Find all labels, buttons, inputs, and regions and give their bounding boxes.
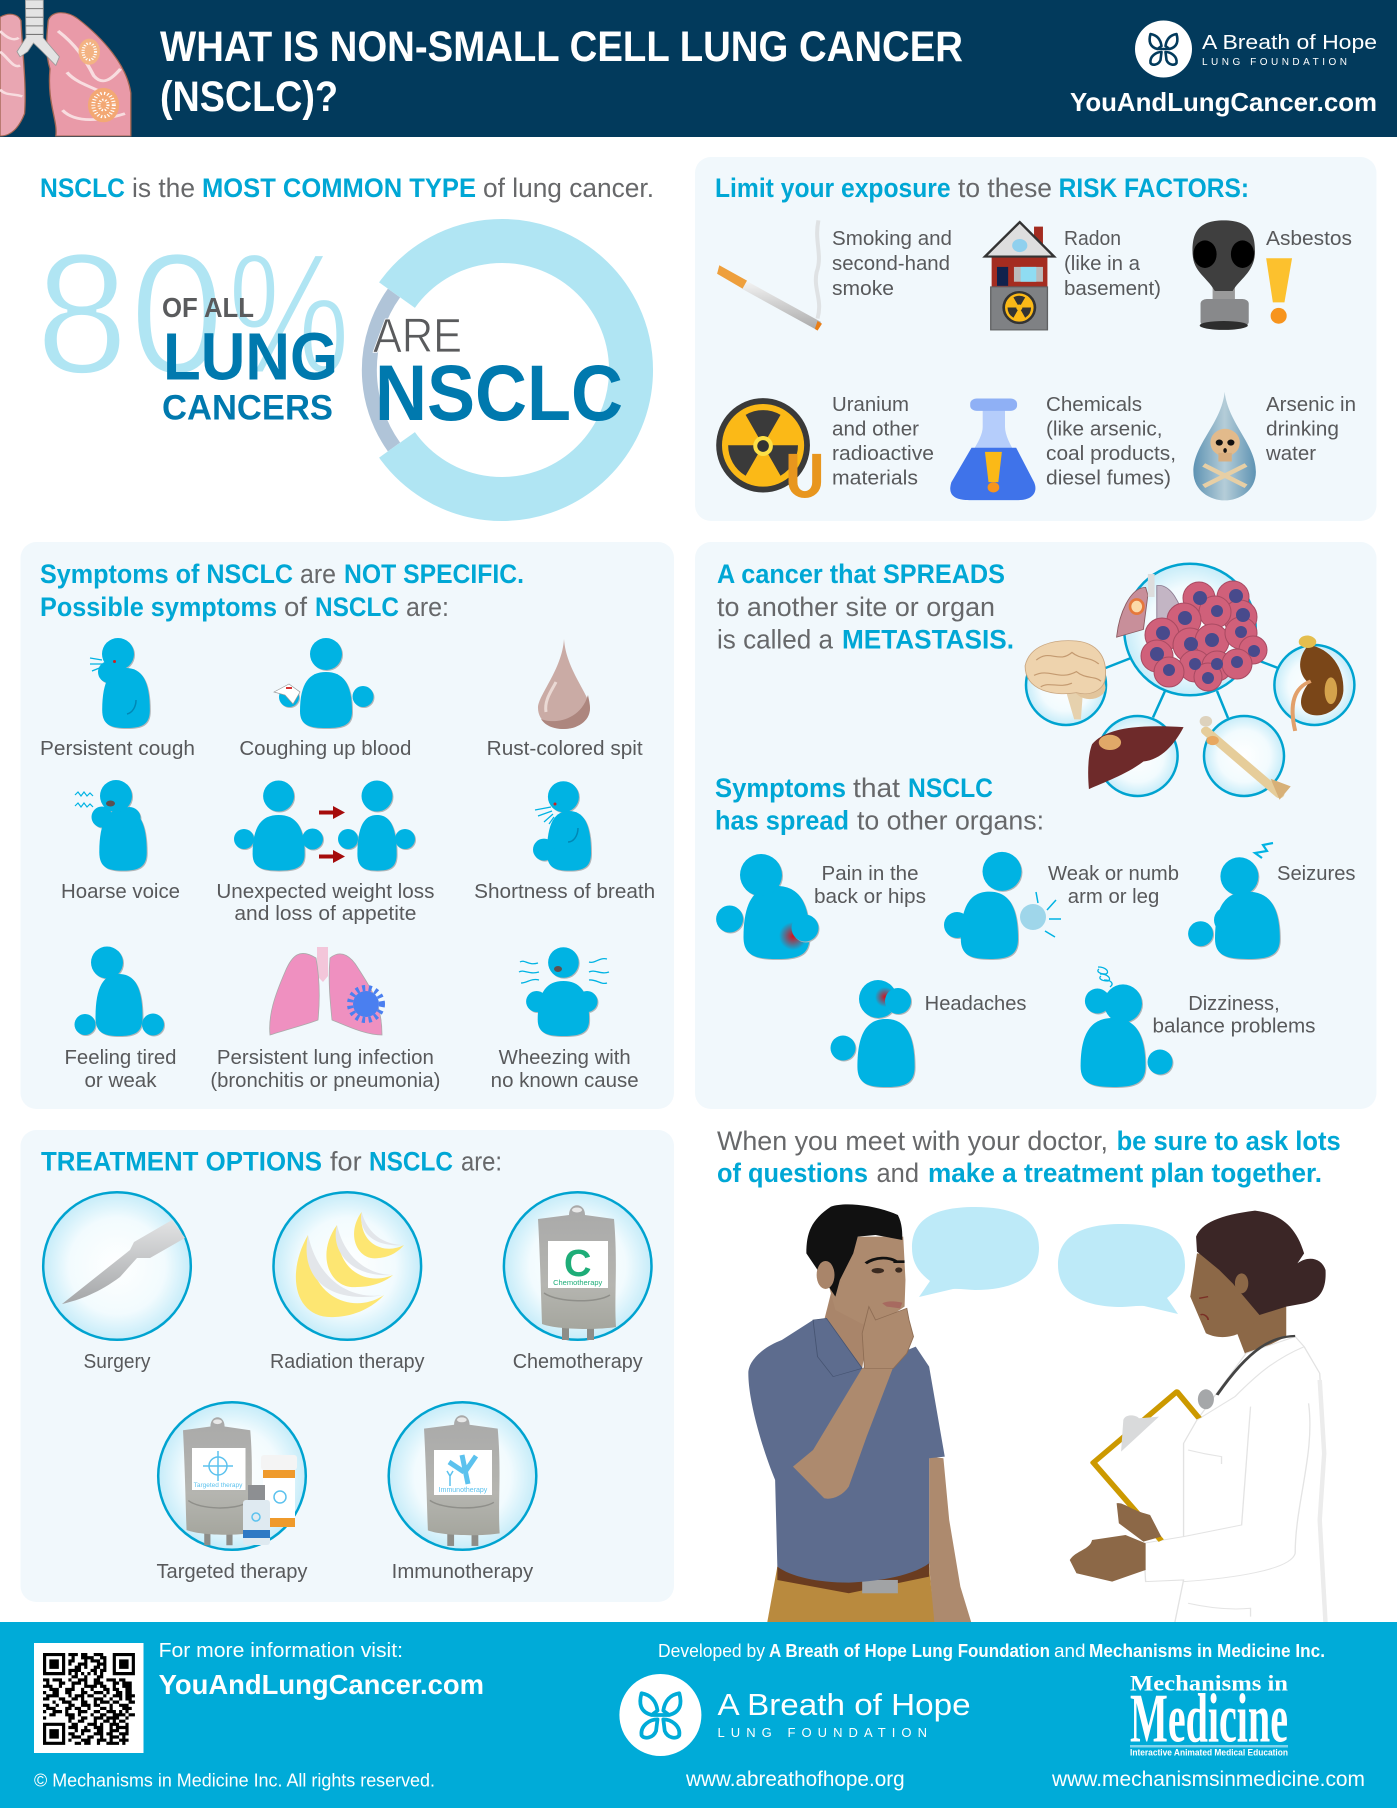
label: weight loss (216, 881, 434, 925)
text: developed by: Developed by (658, 1641, 765, 1661)
heading: most common type: NSCLC (40, 173, 125, 203)
heading: risk factors: to these (958, 173, 1052, 203)
text: more information (159, 1640, 484, 1700)
illustration: doctor speech bubble (1058, 1224, 1185, 1314)
label: persistent cough: Persistent cough (40, 738, 195, 760)
panel: risk factors (695, 157, 1376, 521)
logo: Mechanisms in Medicine: Mechanisms in (1130, 1671, 1288, 1696)
logo: A Breath of Hope: LUNG FOUNDATION (1202, 57, 1347, 68)
text: more information: YouAndLungCancer.com (159, 1669, 484, 1700)
icon: wheezing (519, 947, 609, 1036)
illustration: kidney (1293, 635, 1343, 731)
text: mechanisms website: www.mechanismsinmedicine.com (1051, 1768, 1365, 1791)
big number 80%: 8 (36, 218, 128, 410)
icon: chemotherapy bag: C (564, 1243, 591, 1285)
label: smoking (832, 228, 952, 300)
icon: targeted therapy: Targeted therapy (194, 1482, 243, 1489)
label: uranium: Uranium (832, 394, 909, 416)
label: lung infection: Persistent lung infection (217, 1047, 434, 1069)
heading: treatment options: for (330, 1147, 362, 1177)
text: are NSCLC: ARE (373, 310, 462, 363)
label: lung infection: (bronchitis or pneumonia) (210, 1070, 440, 1092)
label: dizziness: Dizziness, (1188, 993, 1280, 1015)
text: foundation website: www.abreathofhope.org (685, 1768, 905, 1791)
heading: symptoms: Symptoms of NSCLC (40, 559, 293, 589)
section: talk with doctor (717, 1126, 1341, 1623)
label: immunotherapy: Immunotherapy (392, 1561, 533, 1583)
label: targeted therapy: Targeted therapy (156, 1561, 308, 1583)
icon: shortness of breath (533, 781, 591, 871)
logo: A Breath of Hope: A Breath of Hope (1202, 32, 1377, 54)
label: chemicals: (like arsenic, (1046, 419, 1162, 441)
label: weight loss: and loss of appetite (234, 903, 416, 925)
label: feeling tired: or weak (84, 1070, 158, 1092)
heading: spread symptoms: Symptoms (715, 773, 846, 803)
icon: radiation uranium (716, 398, 817, 495)
heading: treatment options: are: (461, 1147, 502, 1177)
text: of all lung cancers: CANCERS (162, 388, 333, 427)
heading: risk factors: RISK FACTORS: (1059, 173, 1249, 203)
label: wheezing: Wheezing with (499, 1047, 631, 1069)
label: feeling tired (64, 1047, 176, 1092)
label: radiation therapy: Radiation therapy (270, 1351, 424, 1373)
heading: ask questions: of questions (717, 1158, 868, 1188)
heading: spread symptoms: NSCLC (908, 773, 993, 803)
heading: symptoms: Possible symptoms (40, 592, 277, 622)
text: developed by (658, 1641, 1325, 1661)
label: rust-colored spit: Rust-colored spit (487, 738, 643, 760)
heading: risk factors (715, 173, 1249, 203)
text: of all lung cancers (162, 292, 338, 427)
heading: symptoms: are (300, 559, 336, 589)
label: lung infection (210, 1047, 440, 1092)
logo: A Breath of Hope footer (619, 1674, 971, 1756)
icon: gas mask (1193, 220, 1255, 330)
title: WHAT IS NON-SMALL CELL LUNG CANCER (160, 23, 963, 71)
diagram: metastasis organs (1025, 564, 1354, 800)
heading: most common type: MOST COMMON TYPE (202, 173, 476, 203)
title (160, 23, 963, 121)
label: arsenic: drinking (1266, 419, 1339, 441)
text: developed by: Mechanisms in Medicine Inc. (1089, 1641, 1325, 1661)
label: arsenic: water (1265, 443, 1316, 465)
header banner (0, 0, 1397, 137)
icon: immunotherapy: Immunotherapy (439, 1487, 488, 1494)
heading: most common type: is the (132, 173, 195, 203)
QR code (34, 1643, 144, 1753)
heading: spread symptoms: to other organs: (857, 806, 1044, 836)
icon: lungs with tumors (0, 0, 131, 136)
label: dizziness: balance problems (1152, 1016, 1316, 1038)
heading: ask questions (717, 1126, 1341, 1188)
label: smoking: Smoking and (832, 228, 952, 250)
heading: most common type (40, 173, 654, 203)
label: chemicals: Chemicals (1046, 394, 1142, 416)
heading: spread symptoms: that (853, 773, 901, 803)
heading: ask questions: make a treatment plan together. (928, 1158, 1322, 1188)
label: shortness of breath: Shortness of breath (474, 881, 655, 903)
heading: ask questions: and (876, 1158, 919, 1188)
label: wheezing (491, 1047, 639, 1092)
heading: symptoms: NSCLC (315, 592, 399, 622)
heading: spread symptoms: has spread (715, 806, 849, 836)
label: radon: basement) (1064, 278, 1161, 300)
label: smoking: second-hand (832, 253, 950, 275)
illustration: patient speech bubble (912, 1207, 1039, 1297)
icon: weak arm (944, 852, 1061, 959)
logo: Mechanisms in Medicine: Interactive Animated Medical Education (1130, 1748, 1288, 1758)
logo: A Breath of Hope footer: A Breath of Hope (718, 1687, 971, 1722)
heading: metastasis: to another site or organ (717, 592, 995, 622)
label: arsenic (1265, 394, 1356, 465)
label: dizziness (1152, 993, 1316, 1038)
heading: ask questions: When you meet with your doctor, (717, 1126, 1108, 1156)
heading: risk factors: Limit your exposure (715, 173, 951, 203)
illustration: liver (1088, 726, 1184, 789)
label: uranium (832, 394, 934, 490)
icon: coughing up blood (274, 638, 374, 728)
label: asbestos: Asbestos (1266, 228, 1352, 250)
icon: targeted therapy (158, 1402, 306, 1550)
illustration: small lungs (1117, 574, 1184, 637)
heading: treatment options: TREATMENT OPTIONS (41, 1147, 322, 1177)
label: coughing up blood: Coughing up blood (239, 738, 411, 760)
text: of all lung cancers: OF ALL (162, 292, 254, 323)
illustration: doctor (1070, 1211, 1326, 1623)
footer (0, 1622, 1397, 1808)
label: back pain (814, 863, 926, 908)
label: smoking: smoke (832, 278, 894, 300)
icon: back pain (716, 854, 818, 959)
heading: symptoms: NOT SPECIFIC. (344, 559, 524, 589)
heading: metastasis (717, 559, 1014, 655)
label: weight loss: Unexpected weight loss (216, 881, 434, 903)
icon: radon house (985, 222, 1054, 330)
label: hoarse voice: Hoarse voice (61, 881, 180, 903)
label: back pain: Pain in the (822, 863, 918, 885)
heading: symptoms: are: (406, 592, 449, 622)
label: weak arm: Weak or numb (1048, 863, 1179, 885)
heading: treatment options (41, 1147, 502, 1177)
heading: metastasis: METASTASIS. (842, 625, 1014, 655)
label: chemicals: diesel fumes) (1046, 468, 1171, 490)
icon: seizures (1188, 843, 1280, 959)
big number 80%: % (228, 218, 350, 410)
icon: chemotherapy bag: Chemotherapy (553, 1278, 603, 1287)
panel: treatment options (20, 1130, 674, 1602)
heading: metastasis: A cancer that SPREADS (717, 559, 1005, 589)
icon: cigarette (717, 220, 822, 331)
text: copyright: © Mechanisms in Medicine Inc. All rights reserved. (34, 1771, 435, 1791)
heading: metastasis: is called a (717, 625, 834, 655)
text: of all lung cancers: LUNG (163, 320, 338, 394)
illustration: brain (1025, 641, 1106, 719)
label: weak arm: arm or leg (1068, 886, 1159, 908)
illustration: tumor cells (1141, 581, 1267, 691)
donut chart 80 percent (369, 241, 631, 499)
icon: feeling tired (74, 946, 164, 1036)
icon: headaches (830, 980, 915, 1087)
panel: 80 percent statistic (36, 173, 654, 499)
icon: immunotherapy (389, 1402, 536, 1550)
text: are NSCLC (373, 310, 623, 437)
heading: spread symptoms (715, 773, 1044, 836)
label: radon: (like in a (1064, 253, 1141, 275)
label: back pain: back or hips (814, 886, 926, 908)
illustration: bone (1200, 716, 1291, 800)
label: chemicals: coal products, (1046, 443, 1176, 465)
heading: most common type: of lung cancer. (483, 173, 654, 203)
label: uranium: radioactive (832, 443, 934, 465)
icon: dizziness (1081, 967, 1172, 1087)
logo: Mechanisms in Medicine (1130, 1671, 1288, 1758)
big number 80%: 0 (130, 218, 224, 410)
icon: scalpel (43, 1192, 191, 1340)
icon: persistent cough (90, 638, 150, 728)
icon: warning exclamation (1266, 258, 1292, 324)
heading: ask questions: be sure to ask lots (1117, 1126, 1341, 1156)
icon: poisoned water drop (1193, 392, 1256, 500)
heading: symptoms (40, 559, 524, 622)
icon: flask (950, 398, 1035, 500)
big number 80% (36, 218, 350, 410)
text: developed by: A Breath of Hope Lung Foundation (769, 1641, 1050, 1661)
text: developed by: and (1054, 1641, 1086, 1661)
label: uranium: and other (832, 419, 919, 441)
website: YouAndLungCancer.com (1070, 87, 1377, 117)
icon: radiation therapy (274, 1192, 421, 1340)
icon: hoarse voice (75, 780, 147, 871)
icon: rust-colored spit drop (538, 639, 590, 729)
heading: treatment options: NSCLC (369, 1147, 453, 1177)
label: surgery: Surgery (84, 1351, 150, 1373)
text: are NSCLC: NSCLC (375, 348, 623, 437)
icon: chemotherapy bag (504, 1192, 652, 1340)
label: wheezing: no known cause (491, 1070, 639, 1092)
panel: symptoms (20, 542, 674, 1109)
title: (NSCLC)? (160, 73, 338, 121)
label: chemotherapy: Chemotherapy (513, 1351, 643, 1373)
illustration: patient (748, 1204, 972, 1623)
label: arsenic: Arsenic in (1266, 394, 1356, 416)
label: radon: Radon (1064, 228, 1121, 250)
text: more information: For more information visit: (159, 1640, 403, 1662)
logo: A Breath of Hope footer: LUNG FOUNDATION (718, 1725, 927, 1740)
label: feeling tired: Feeling tired (64, 1047, 176, 1069)
heading: symptoms: of (284, 592, 307, 622)
label: radon (1064, 228, 1161, 300)
label: headaches: Headaches (925, 993, 1026, 1015)
label: chemicals (1046, 394, 1176, 490)
logo: A Breath of Hope (1135, 20, 1377, 78)
label: uranium: materials (832, 468, 918, 490)
icon: weight loss (234, 780, 415, 871)
label: seizures: Seizures (1277, 863, 1356, 885)
label: weak arm (1048, 863, 1179, 908)
icon: infected lungs (270, 947, 382, 1035)
panel: metastasis and spread symptoms (695, 542, 1376, 1109)
